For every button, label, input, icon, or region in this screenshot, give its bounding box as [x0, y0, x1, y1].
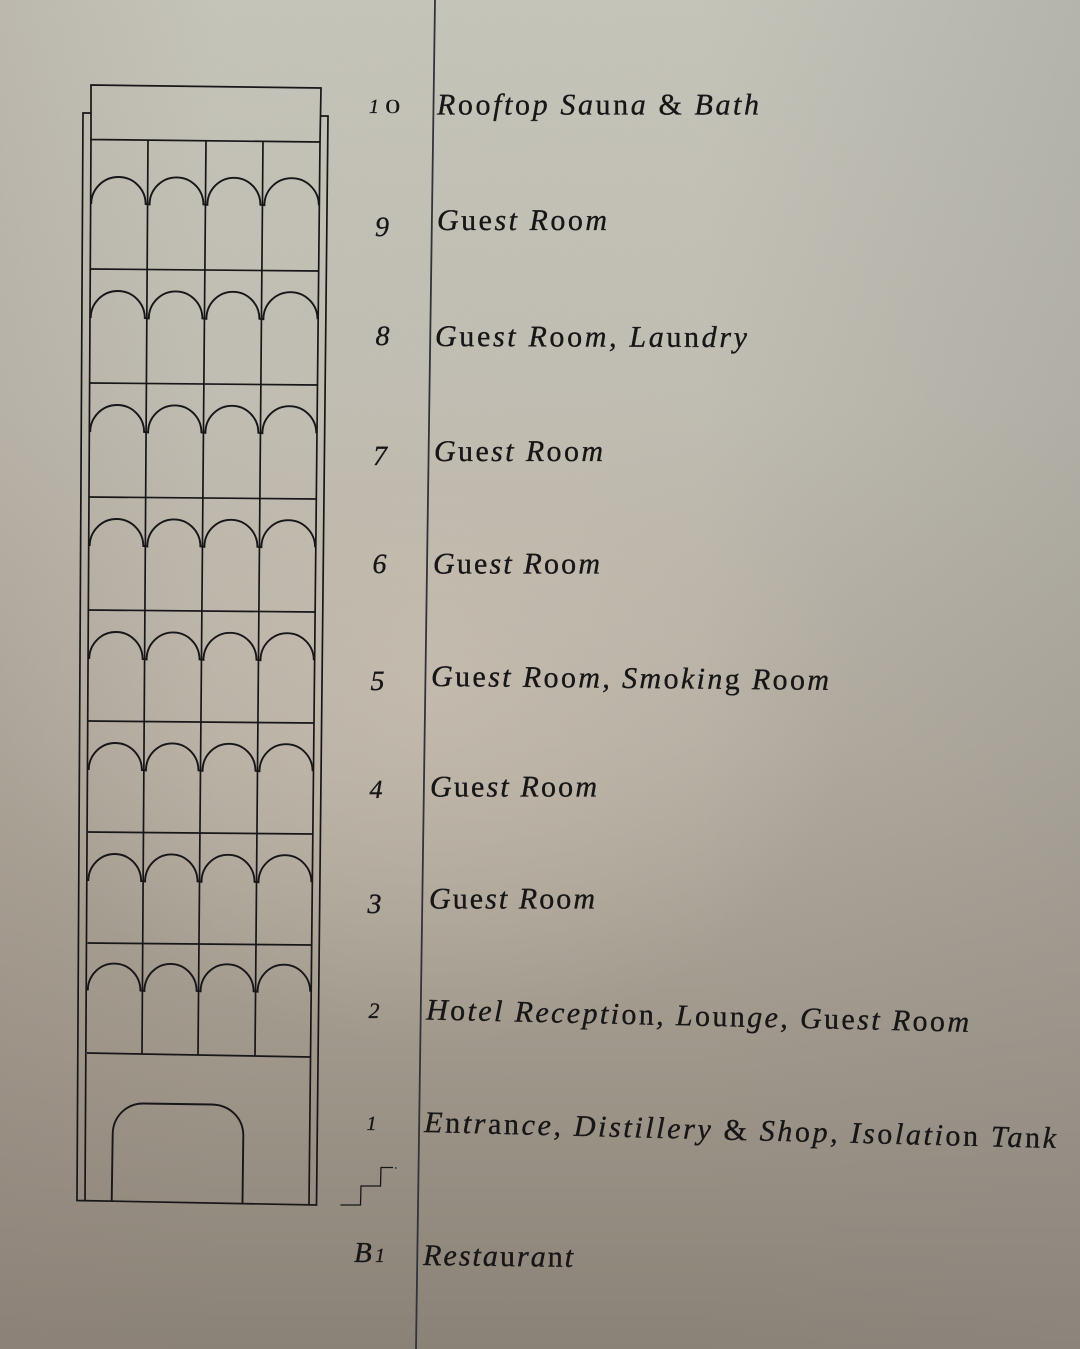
staircase icon [340, 1168, 396, 1205]
number 2: 2 [368, 998, 380, 1023]
label B1: 1 [375, 1245, 385, 1267]
floor descriptions [422, 88, 1057, 1274]
floor numbers [354, 96, 400, 1269]
number 9: 9 [375, 212, 389, 243]
floor 5 description: Guest Room, Smoking Room [431, 660, 829, 697]
number 4: 4 [370, 775, 382, 804]
floor 9 description: Guest Room [437, 204, 607, 237]
label B1: B [354, 1237, 372, 1269]
outer wall frame [77, 113, 328, 1205]
number 3: 3 [366, 889, 382, 920]
floor 4 description: Guest Room [430, 770, 597, 804]
arches: floor 3 [88, 854, 311, 882]
number 10: 1 [369, 96, 379, 118]
arches: floor 9 [91, 177, 319, 205]
floor 10 description: Rooftop Sauna & Bath [436, 88, 759, 122]
number 10: 0 [385, 96, 400, 118]
number 1: 1 [366, 1113, 376, 1135]
floor 1 description: Entrance, Distillery & Shop, Isolation Tank [423, 1106, 1057, 1155]
floor 3 description: Guest Room [429, 882, 595, 916]
floor 7 description: Guest Room [434, 435, 603, 468]
arches: floor 2 [88, 964, 310, 992]
arches: floor 6 [90, 519, 315, 547]
number 6: 6 [372, 549, 386, 580]
arches: floor 4 [89, 743, 313, 771]
arches: floor 7 [90, 405, 316, 433]
rooftop box [91, 85, 321, 142]
basement description: Restaurant [422, 1239, 574, 1274]
floor lines [87, 269, 319, 1057]
arches: floor 5 [89, 632, 314, 660]
entrance door arch [112, 1104, 243, 1203]
column lines [142, 140, 263, 1056]
number 7: 7 [373, 441, 388, 472]
arches: floor 8 [91, 291, 318, 319]
floor 8 description: Guest Room, Laundry [435, 320, 748, 354]
number 5: 5 [370, 666, 384, 697]
label B1 [354, 1237, 385, 1269]
vertical divider line [416, 0, 435, 1349]
inner wall lines [85, 139, 320, 1204]
number 10 [369, 96, 400, 118]
floor 6 description: Guest Room [433, 548, 600, 580]
building elevation drawing [77, 85, 328, 1205]
number 8: 8 [376, 321, 390, 352]
floor 2 description: Hotel Reception, Lounge, Guest Room [425, 993, 969, 1039]
